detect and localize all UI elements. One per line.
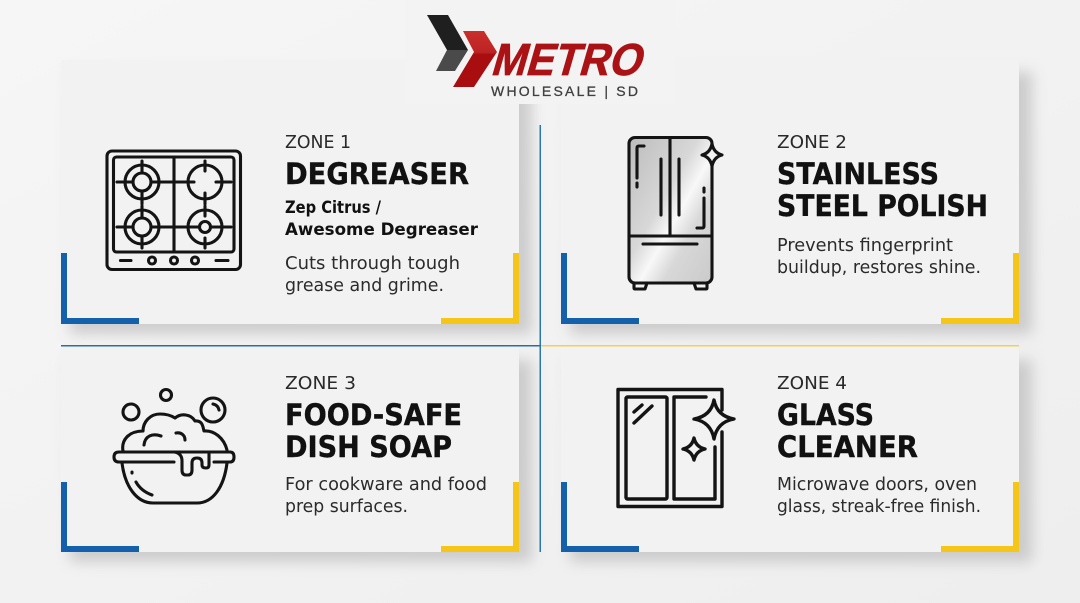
heading: glass cleaner [777, 398, 918, 464]
heading: glass cleaner: CLEANER [777, 430, 918, 464]
heading: food-safe dish soap [285, 398, 462, 464]
heading: stainless steel polish [777, 157, 988, 223]
heading: food-safe dish soap: FOOD-SAFE [285, 398, 462, 432]
icon: window with sparkles [618, 390, 734, 506]
logo tagline: WHOLESALE | SD: WHOLESALE | SD [491, 83, 638, 99]
text: degreaser description [285, 253, 460, 296]
text: glass cleaner description: glass, streak-free finish. [777, 496, 981, 517]
corner accent: yellow [441, 482, 519, 552]
text: zone 4 label: ZONE 4 [777, 374, 847, 394]
text: degreaser description: Cuts through tough [285, 253, 460, 274]
text: polish description [777, 235, 981, 278]
text: zone 3 label: ZONE 3 [285, 374, 356, 394]
icon: stainless refrigerator with sparkle [629, 138, 722, 289]
logo wordmark: METRO: METRO [487, 34, 652, 85]
corner accent: blue [61, 253, 139, 324]
panel: zone 3 food-safe dish soap [61, 346, 532, 562]
text: polish description: buildup, restores shine. [777, 257, 981, 278]
text: product names: Zep Citrus / [285, 198, 382, 217]
corner accent: yellow [441, 253, 519, 324]
corner accent: blue [61, 482, 139, 552]
text: polish description: Prevents fingerprint [777, 235, 953, 256]
panel: zone 1 degreaser [61, 60, 532, 334]
text: zone 2 label: ZONE 2 [777, 133, 847, 153]
text: glass cleaner description: Microwave doors, oven [777, 474, 977, 495]
logo chevron: red [453, 31, 497, 87]
corner accent: yellow [941, 482, 1019, 552]
panel: zone 2 stainless steel polish [561, 60, 1032, 334]
text: product names: Awesome Degreaser [285, 220, 479, 239]
heading: glass cleaner: GLASS [777, 398, 874, 432]
logo chevron: black and grey [427, 15, 468, 71]
corner accent: blue [561, 253, 639, 324]
text: degreaser description: grease and grime. [285, 275, 444, 296]
heading: stainless steel polish: STEEL POLISH [777, 189, 988, 223]
text: glass cleaner description [777, 474, 981, 517]
icon: soap bowl with bubbles [114, 390, 234, 503]
corner accent: blue [561, 482, 639, 552]
logo: Metro Wholesale SD [405, 0, 675, 104]
text: soap description: prep surfaces. [285, 496, 408, 517]
corner accent: yellow [941, 253, 1019, 324]
text: soap description: For cookware and food [285, 474, 487, 495]
text: product names [285, 198, 479, 239]
icon: gas stove cooktop [107, 151, 240, 270]
heading: stainless steel polish: STAINLESS [777, 157, 939, 191]
text: zone 1 label: ZONE 1 [285, 133, 351, 153]
heading: degreaser: DEGREASER [285, 157, 469, 191]
panel: zone 4 glass cleaner [561, 346, 1032, 562]
heading: food-safe dish soap: DISH SOAP [285, 430, 452, 464]
text: soap description [285, 474, 487, 517]
